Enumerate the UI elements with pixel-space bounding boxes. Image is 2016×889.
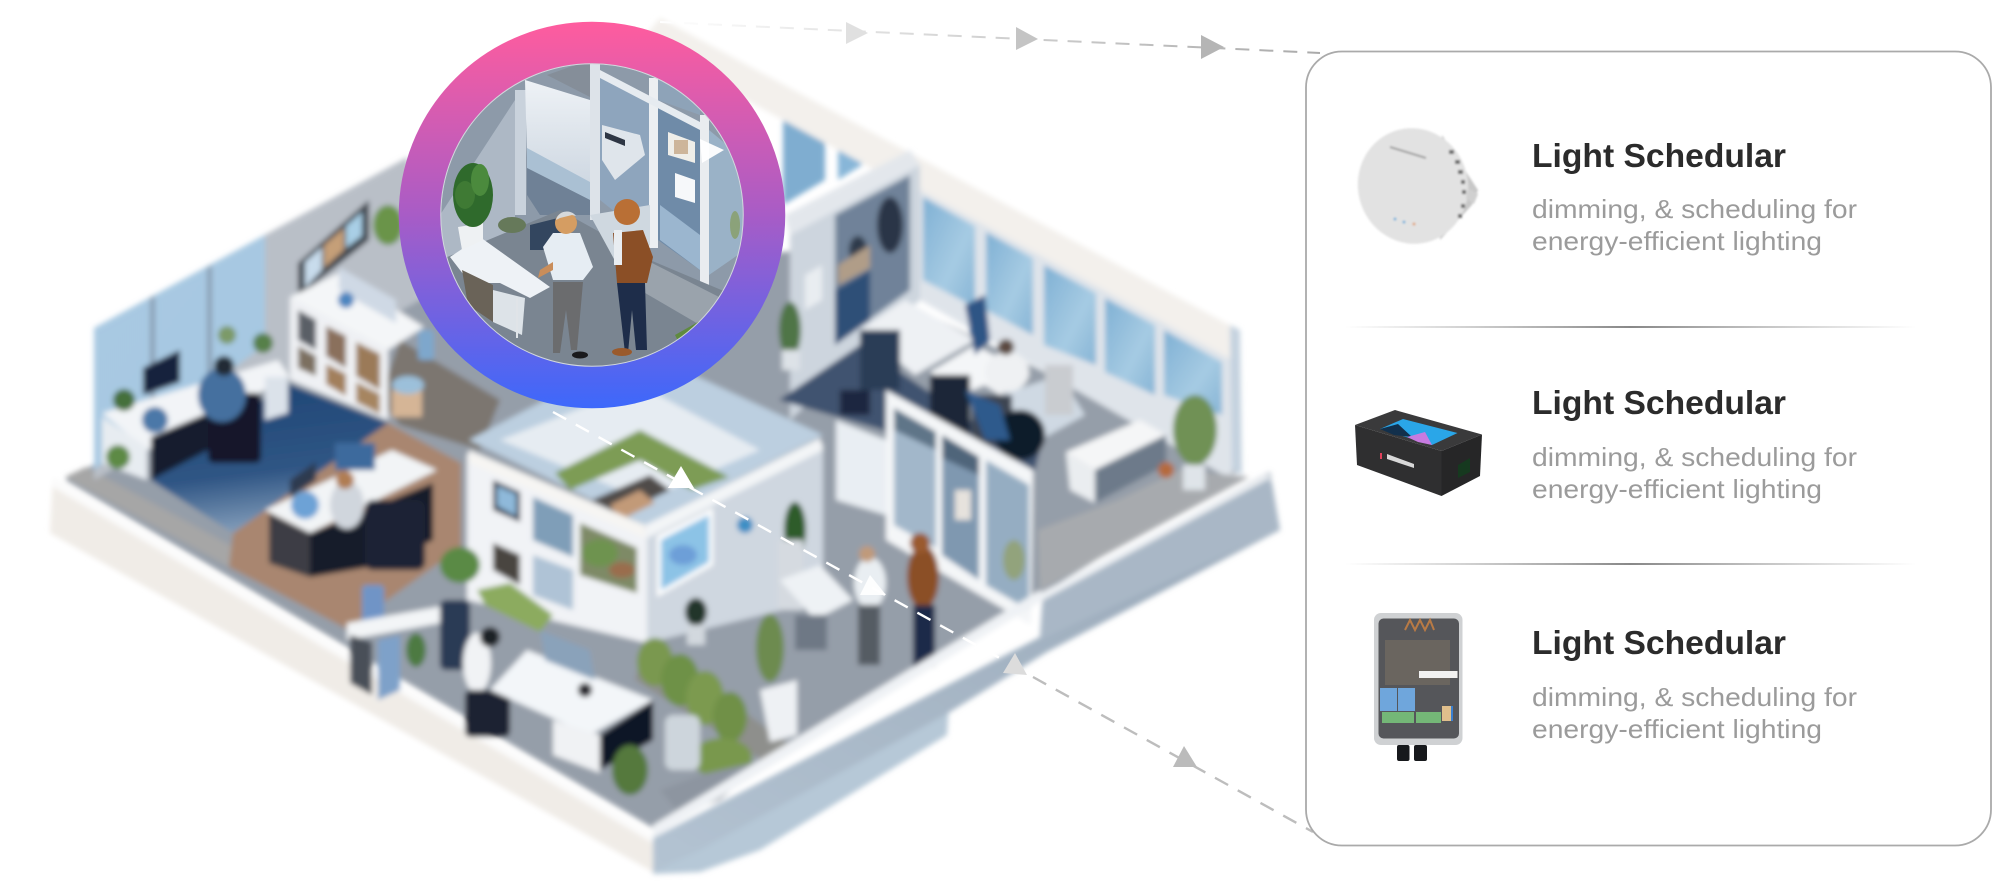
- people: man and woman: [854, 533, 939, 667]
- light floor panel: [836, 420, 886, 515]
- plant: small dark: [685, 598, 707, 626]
- description: item 2: dimming, & scheduling for: [1532, 442, 1857, 472]
- green hedge: [477, 583, 553, 632]
- arrow: top 2: [1016, 27, 1038, 50]
- description: item 1: dimming, & scheduling for: [1532, 194, 1857, 224]
- description: item 2: energy-efficient lighting: [1532, 474, 1822, 504]
- wood floor: [229, 423, 461, 629]
- description: item 3: dimming, & scheduling for: [1532, 682, 1857, 712]
- heading: item 2: Light Schedular: [1532, 384, 1786, 421]
- icon: open circuit board enclosure: [1374, 613, 1462, 761]
- arrow: gray outside building: [1173, 746, 1197, 767]
- connector: top dashed line: [660, 22, 1320, 59]
- wood desk: [265, 450, 437, 533]
- central table: [780, 565, 853, 620]
- photo woman: [617, 283, 647, 353]
- connector: lower dashed line: [553, 412, 1313, 832]
- arrow: top 3: [1201, 35, 1224, 59]
- right room floors: [779, 345, 1040, 510]
- arrow: light gray at wall edge: [1003, 653, 1027, 675]
- shadow under right wall: [653, 690, 950, 874]
- divider: first: [1345, 326, 1916, 328]
- wall plant: [373, 205, 403, 245]
- photo plant: [458, 223, 483, 250]
- building: blurred isometric office floor plan: [50, 18, 1280, 874]
- arrow: white on man: [860, 575, 886, 595]
- stool: [392, 390, 422, 417]
- diagonal beam: [785, 150, 920, 235]
- focus circle: gradient ring with zoomed photo: [420, 42, 764, 388]
- outer left cream wall: [50, 477, 653, 872]
- right room desks: [860, 300, 975, 375]
- photo man: [553, 282, 583, 353]
- floor: [65, 250, 1240, 828]
- outer right wall: [653, 472, 1280, 872]
- plant: back wall: [779, 302, 801, 358]
- zoomed photo: [441, 64, 743, 366]
- arrow: white on roof: [668, 466, 694, 488]
- cream band: [640, 18, 1235, 367]
- corner post: [1230, 325, 1242, 475]
- icon: round sensor device: [1345, 116, 1481, 256]
- blue carpet: [151, 383, 388, 533]
- right room upper windows: [783, 115, 825, 205]
- hedge row: [635, 640, 790, 765]
- plant: right corner: [1173, 395, 1217, 465]
- left desk: [102, 360, 290, 450]
- arrow: top 1: [846, 22, 868, 44]
- divider: second: [1345, 563, 1916, 565]
- description: item 3: energy-efficient lighting: [1532, 714, 1822, 744]
- left room window wall: [94, 157, 420, 480]
- window wall: [920, 190, 1232, 480]
- center room roof: [469, 350, 823, 525]
- heading: item 3: Light Schedular: [1532, 624, 1786, 661]
- white arrow on photo: [700, 139, 724, 163]
- bookshelf: [290, 273, 424, 350]
- left desk chair and person: [208, 393, 261, 463]
- back wall of right room: [790, 165, 920, 420]
- center room: right face: [647, 443, 823, 643]
- photo floor: [447, 210, 722, 366]
- glass partition: [886, 390, 1033, 625]
- blue water cooler: [362, 585, 384, 631]
- plant: center: [784, 502, 806, 558]
- planter: [760, 680, 797, 742]
- center room: left face: [467, 453, 647, 643]
- right cabinet: [1066, 420, 1166, 470]
- wall picture: [298, 200, 369, 297]
- heading: item 1: Light Schedular: [1532, 137, 1786, 174]
- plants: lower: [612, 745, 648, 795]
- photo desk: [450, 237, 550, 298]
- left gray strip: [65, 467, 245, 567]
- lower desk and person: [463, 633, 491, 693]
- partition wall: [347, 603, 468, 640]
- panel: product card: [1306, 52, 1991, 846]
- description: item 1: energy-efficient lighting: [1532, 226, 1822, 256]
- icon: black controller box: [1355, 410, 1482, 496]
- gradient ring: [420, 42, 764, 388]
